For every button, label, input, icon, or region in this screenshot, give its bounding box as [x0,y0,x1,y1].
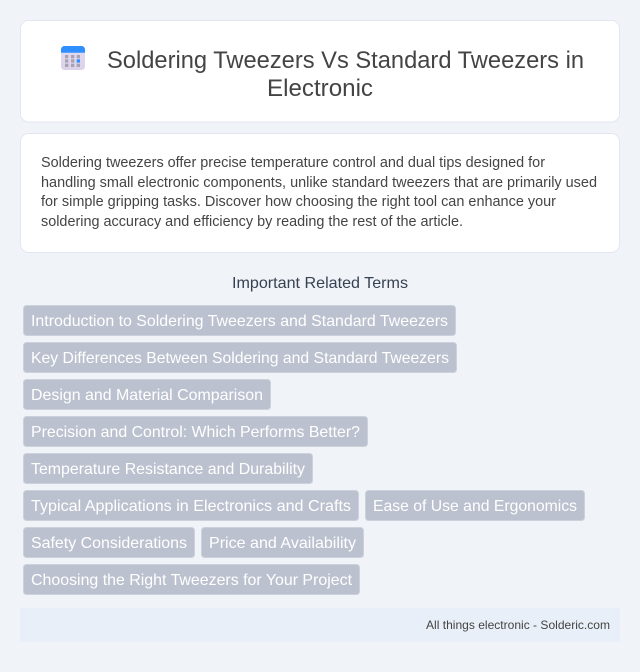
summary text: soldering accuracy and efficiency by reading the rest of the article. [41,214,463,230]
tag: Introduction to Soldering Tweezers and Standard Tweezers [31,313,448,330]
summary text [41,155,597,230]
tag: Design and Material Comparison [31,387,263,404]
tag: Precision and Control: Which Performs Better? [31,424,360,441]
tag: Safety Considerations [31,535,187,552]
tag: Price and Availability [209,535,356,552]
tag: Typical Applications in Electronics and Crafts [31,498,351,515]
tags: related terms [24,306,584,594]
title: Soldering Tweezers Vs Standard Tweezers in [107,47,584,74]
tag: Key Differences Between Soldering and Standard Tweezers [31,350,449,367]
panel: title card [20,20,620,122]
tag [24,564,360,594]
title [107,47,584,102]
panel: summary [20,134,620,252]
heading: related terms: Important Related Terms [232,275,408,292]
tag [24,380,270,410]
tag [24,490,358,520]
summary text: for simple gripping tasks. Discover how choosing the right tool can enhance your [41,194,556,210]
summary text: handling small electronic components, unlike standard tweezers that are primarily used [41,175,597,191]
tag [24,416,368,446]
tag [24,342,456,372]
footer [20,608,620,642]
tag: Temperature Resistance and Durability [31,461,305,478]
tag: Choosing the Right Tweezers for Your Project [31,572,353,589]
footer text: All things electronic - Solderic.com [426,618,610,632]
title: Electronic [267,75,373,102]
tag: Ease of Use and Ergonomics [373,498,577,515]
tag [24,454,312,484]
icon: calendar [61,46,85,70]
tag [202,528,364,558]
summary text: Soldering tweezers offer precise temperature control and dual tips designed for [41,155,545,171]
tag [366,490,584,520]
tag [24,306,456,336]
tag [24,528,194,558]
